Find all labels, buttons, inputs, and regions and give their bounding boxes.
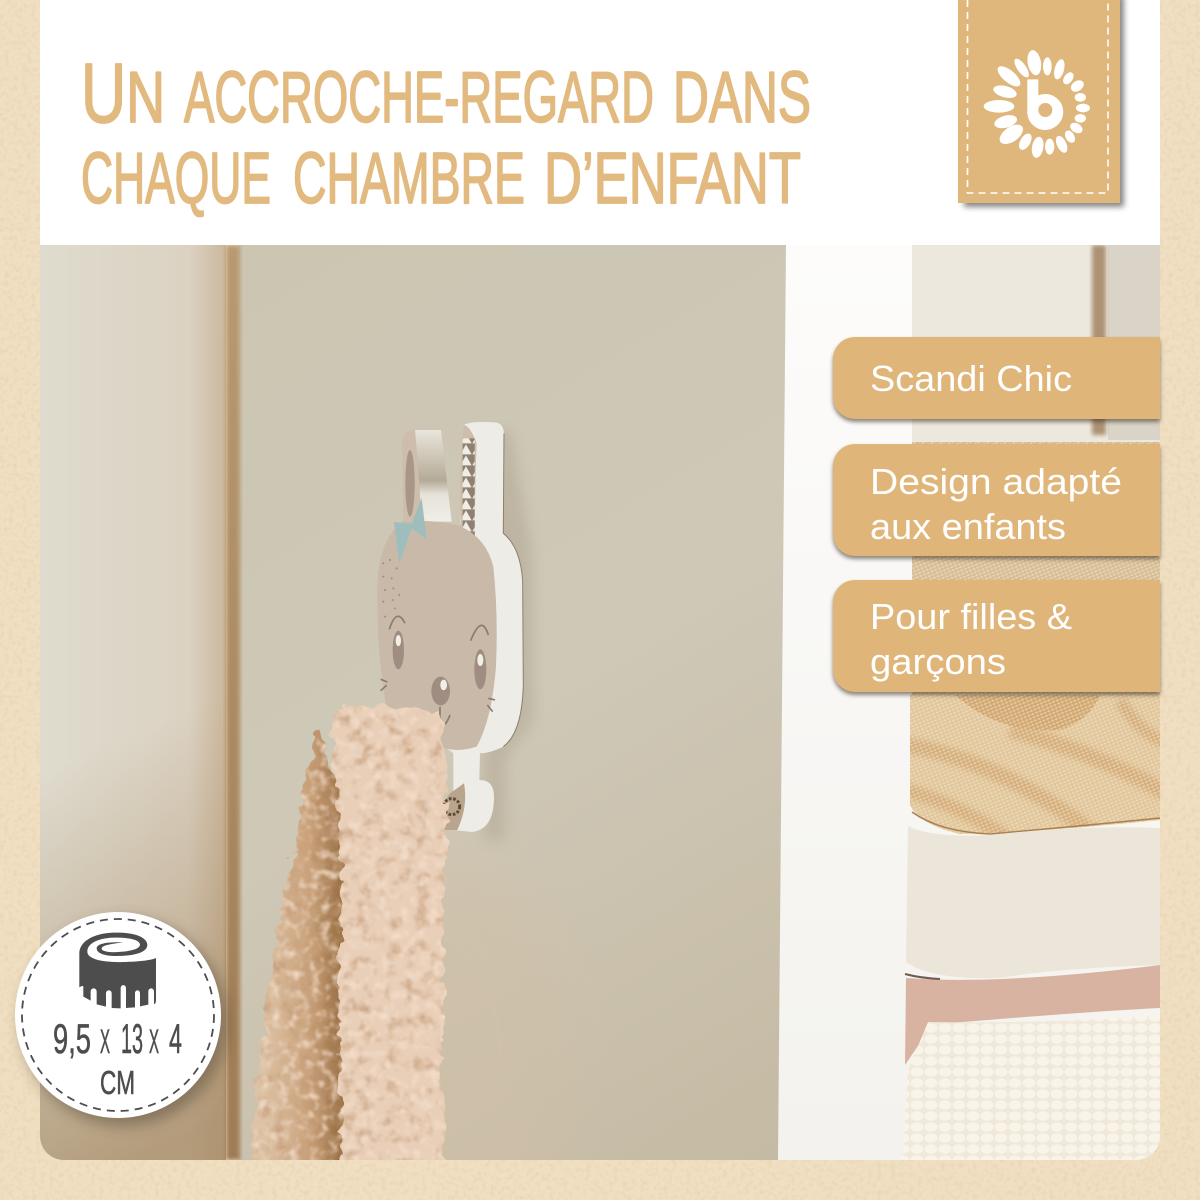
dimension text <box>53 1015 182 1101</box>
blue bow <box>394 498 427 563</box>
brand tag with logo <box>958 0 1124 207</box>
pill: Design adapté aux enfants: aux enfants <box>870 506 1066 547</box>
hook body white <box>440 422 523 832</box>
dimension text: CM <box>100 1064 135 1101</box>
wall groove <box>226 245 240 1160</box>
freckles <box>382 559 400 618</box>
dimension text: 13 <box>121 1015 143 1062</box>
pill: Design adapté aux enfants <box>833 444 1160 559</box>
pill: Pour filles & garçons: garçons <box>870 641 1006 682</box>
face <box>377 521 497 750</box>
left ear <box>415 430 452 522</box>
cast shadow <box>484 430 534 840</box>
eyes and nose <box>393 631 404 669</box>
logo: sunflower b <box>984 49 1090 159</box>
pill: Pour filles & garçons <box>833 580 1160 695</box>
fluffy towel <box>252 706 447 1170</box>
cream blanket <box>906 826 1160 978</box>
pill: Design adapté aux enfants: Design adapté <box>870 461 1122 502</box>
title <box>81 46 811 219</box>
stack of folded textiles <box>902 442 1170 1160</box>
pill: Pour filles & garçons: Pour filles & <box>870 596 1072 637</box>
dimension text: 9,5 <box>53 1015 91 1062</box>
title: DANS <box>673 58 811 138</box>
pink textile <box>905 965 1160 1065</box>
title: ACCROCHE-REGARD <box>184 58 654 138</box>
dimensions badge <box>15 912 228 1126</box>
title: D’ENFANT <box>544 139 801 219</box>
brows, mouth and whiskers <box>381 616 495 726</box>
tan sweater <box>910 695 1160 835</box>
dimension text: 4 <box>169 1015 182 1062</box>
right ear face <box>460 425 477 540</box>
background wall at right <box>912 245 1160 445</box>
title: CHAMBRE <box>293 139 525 219</box>
door warm tint near towel <box>310 860 570 1200</box>
left wall panel <box>40 245 226 1160</box>
icon: measuring tape <box>79 933 156 1008</box>
towel front <box>330 706 447 1170</box>
pill: Scandi Chic <box>833 337 1160 422</box>
upper knit <box>912 442 1160 704</box>
white knit <box>902 1015 1160 1160</box>
photo <box>40 245 1170 1200</box>
dimension text: X <box>100 1023 110 1061</box>
title: UN <box>81 46 165 140</box>
title: CHAQUE <box>81 139 271 219</box>
hook tip swirl <box>443 783 466 830</box>
bunny hook <box>377 422 534 840</box>
header panel <box>40 0 1160 245</box>
white frame <box>778 245 1160 1160</box>
pill: Scandi Chic: Scandi Chic <box>870 358 1072 399</box>
door panel <box>238 245 786 1160</box>
towel back strand <box>252 728 345 1170</box>
dimension text: X <box>149 1023 159 1061</box>
